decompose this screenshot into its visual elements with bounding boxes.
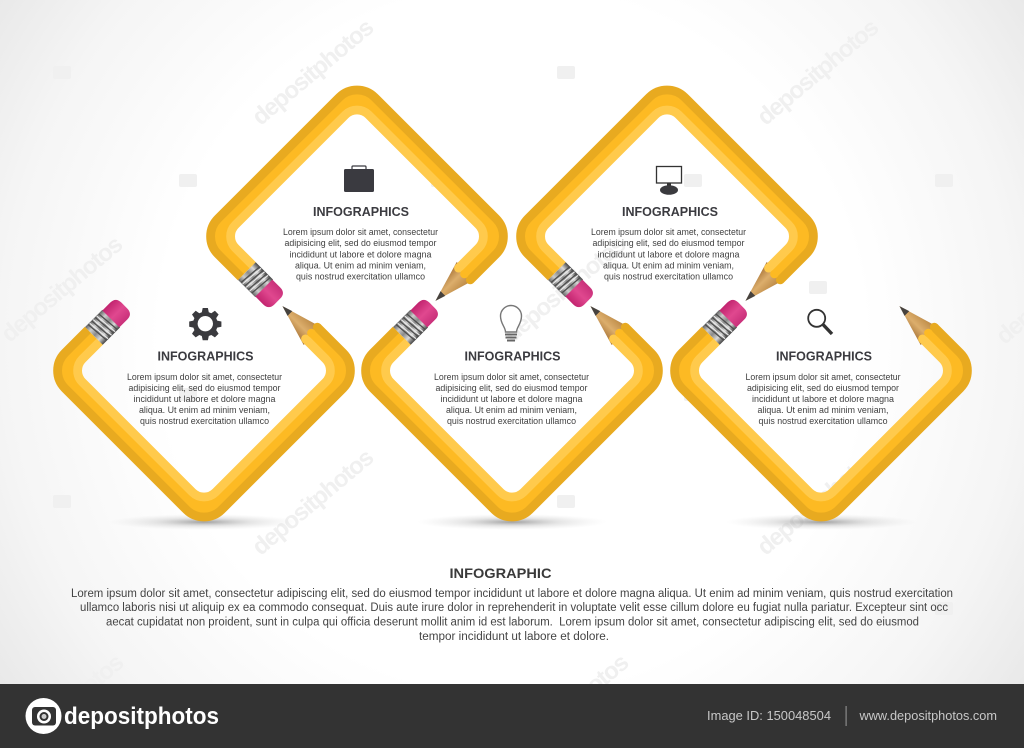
text block — [127, 372, 282, 426]
panel: lower pencil 1 — [58, 297, 350, 530]
text block: incididunt ut labore et dolore magna — [752, 394, 894, 404]
icon: camera logo — [26, 698, 62, 734]
text block: Lorem ipsum dolor sit amet, consectetur — [283, 227, 438, 237]
text block: aliqua. Ut enim ad minim veniam, — [295, 260, 426, 270]
pencil shadow — [726, 514, 916, 530]
text block — [283, 227, 438, 282]
text block: Lorem ipsum dolor sit amet, consectetur — [591, 227, 746, 237]
watermarks: depositphotos — [752, 444, 884, 561]
footer bar — [0, 684, 1024, 748]
pencil shadow — [417, 514, 607, 530]
text block: Lorem ipsum dolor sit amet, consectetur — [434, 372, 589, 382]
text block: quis nostrud exercitation ullamco — [447, 416, 576, 426]
text block: Lorem ipsum dolor sit amet, consectetur — [127, 372, 282, 382]
main heading: INFOGRAPHIC — [450, 565, 552, 581]
text block: Lorem ipsum dolor sit amet, consectetur — [746, 372, 900, 382]
text block: adipisicing elit, sed do eiusmod tempor — [128, 383, 280, 393]
watermarks: depositphotos — [247, 14, 379, 131]
pencil frame — [521, 90, 813, 310]
watermarks: depositphotos — [0, 231, 128, 348]
watermarks: depositphotos — [752, 14, 884, 131]
website: www.depositphotos.com — [859, 708, 997, 723]
text block: aliqua. Ut enim ad minim veniam, — [603, 260, 734, 270]
icon: monitor — [656, 166, 682, 195]
text block — [746, 372, 900, 426]
text block — [591, 227, 746, 282]
paragraph: aecat cupidatat non proident, sunt in culpa qui officia deserunt mollit anim id est laborum. Lorem ipsum dolor sit amet, consectetur adipiscing elit, sed do eiusmod — [106, 616, 919, 628]
text block: incididunt ut labore et dolore magna — [134, 394, 276, 404]
icon: light bulb — [500, 306, 522, 340]
panel: upper pencil 2 — [521, 90, 813, 310]
pencil frame — [366, 297, 658, 517]
icon: gear — [189, 308, 221, 340]
heading: INFOGRAPHICS — [622, 205, 718, 219]
heading: INFOGRAPHICS — [158, 350, 254, 364]
text block: adipisicing elit, sed do eiusmod tempor — [436, 383, 588, 393]
panel: upper pencil 1 — [211, 90, 503, 310]
text block: adipisicing elit, sed do eiusmod tempor — [284, 238, 436, 248]
text block: adipisicing elit, sed do eiusmod tempor — [592, 238, 744, 248]
text block: incididunt ut labore et dolore magna — [440, 394, 582, 404]
text block: quis nostrud exercitation ullamco — [296, 272, 425, 282]
text block — [434, 372, 589, 426]
text block: incididunt ut labore et dolore magna — [598, 249, 740, 259]
logo wordmark: depositphotos — [64, 703, 219, 730]
pencil frame — [58, 297, 350, 517]
text block: incididunt ut labore et dolore magna — [290, 249, 432, 259]
watermarks: depositphotos — [499, 231, 631, 348]
paragraph: Lorem ipsum dolor sit amet, consectetur adipiscing elit, sed do eiusmod tempor incididunt ut labore et dolore magna aliqua. Ut enim ad minim veniam, quis nostrud exercitation — [71, 588, 953, 600]
text block: adipisicing elit, sed do eiusmod tempor — [747, 383, 899, 393]
pencil shadow — [109, 514, 299, 530]
text block: quis nostrud exercitation ullamco — [140, 416, 269, 426]
panel: lower pencil 2 — [366, 297, 658, 530]
icon: magnifying glass — [808, 310, 832, 334]
image id: Image ID: 150048504 — [707, 708, 831, 723]
text block: aliqua. Ut enim ad minim veniam, — [446, 405, 577, 415]
paragraph: ullamco laboris nisi ut aliquip ex ea commodo consequat. Duis aute irure dolor in reprehenderit in voluptate velit esse cillum dolore eu fugiat nulla pariatur. Excepteur sint occ — [80, 602, 948, 614]
text block: aliqua. Ut enim ad minim veniam, — [758, 405, 888, 415]
panel: lower pencil 3 — [675, 297, 967, 530]
pencil frame — [675, 297, 967, 517]
heading: INFOGRAPHICS — [776, 350, 872, 364]
text block: aliqua. Ut enim ad minim veniam, — [139, 405, 270, 415]
paragraph: tempor incididunt ut labore et dolore. — [419, 631, 609, 643]
pencil frame — [211, 90, 503, 310]
watermarks: depositphotos — [247, 444, 379, 561]
separator — [846, 706, 847, 726]
heading: INFOGRAPHICS — [313, 205, 409, 219]
text block: quis nostrud exercitation ullamco — [758, 416, 888, 426]
heading: INFOGRAPHICS — [464, 350, 560, 364]
paragraph — [71, 588, 953, 643]
icon: briefcase — [344, 166, 374, 192]
text block: quis nostrud exercitation ullamco — [604, 272, 733, 282]
